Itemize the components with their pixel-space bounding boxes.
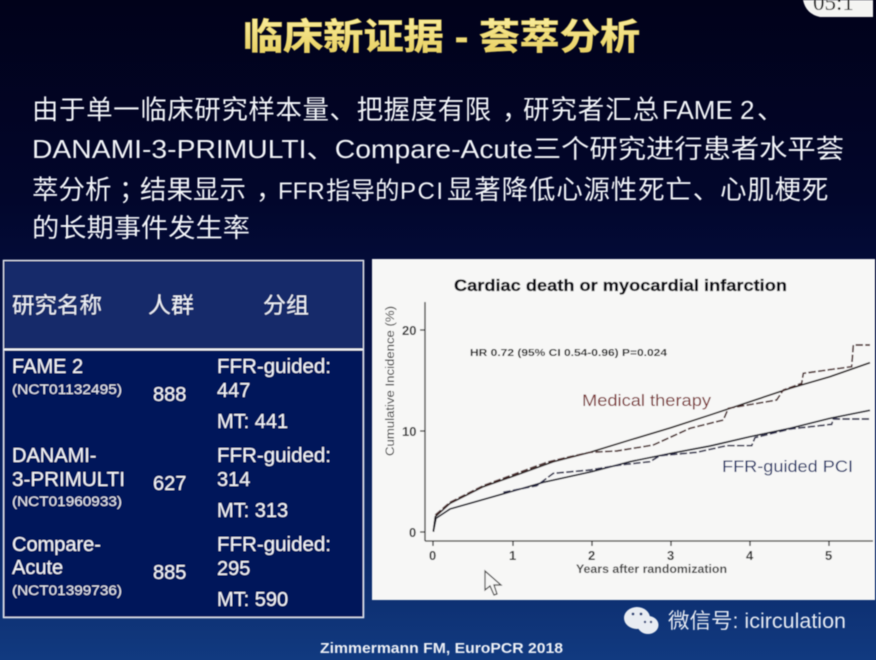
intro text block: 研究者汇总: [523, 95, 660, 125]
x axis: Years after randomization: [576, 564, 727, 576]
label: Medical therapy: Medical therapy: [582, 392, 712, 410]
intro text block: PCI: [400, 178, 445, 205]
intro text block: 显著降低心源性死亡、心肌梗死: [447, 175, 829, 205]
intro text block: 的长期事件发生率: [32, 213, 250, 243]
icon: WeChat logo: [624, 607, 658, 634]
intro text block: ；: [119, 175, 146, 205]
row: FAME 2: (NCT01132495): [12, 382, 122, 397]
row: Compare-Acute: Compare-: [12, 534, 101, 556]
row: DANAMI-3-PRIMULTI: [12, 445, 331, 522]
intro text block: FFR: [278, 178, 325, 205]
curve: FFR-guided PCI: [433, 410, 870, 532]
row: Compare-Acute: MT: 590: [217, 589, 288, 611]
icon: mouse cursor: [485, 571, 501, 595]
intro text block: 指导的: [326, 177, 400, 205]
x axis: 2: [588, 548, 595, 563]
y axis: 10: [402, 424, 416, 439]
row: Compare-Acute: [12, 534, 331, 611]
watermark: WeChat account: [624, 607, 846, 634]
intro text block: ，: [502, 95, 528, 125]
intro text block: FAME 2: [662, 95, 754, 125]
x axis: 4: [746, 548, 754, 563]
citation: Zimmermann FM, EuroPCR 2018: [320, 640, 563, 657]
table header: 分组: [263, 293, 309, 318]
curve: medical therapy: [433, 345, 870, 532]
intro text block: ，: [256, 175, 282, 205]
intro text block: 、: [757, 95, 784, 125]
panel: study table: [4, 260, 364, 618]
row: Compare-Acute: FFR-guided:: [217, 534, 331, 556]
title: 临床新证据 - 荟萃分析: [243, 16, 640, 57]
y axis: 0: [409, 525, 416, 540]
row: FAME 2: MT: 441: [217, 411, 288, 433]
row: DANAMI-3-PRIMULTI: 3-PRIMULTI: [12, 469, 125, 491]
chart title: Cardiac death or myocardial infarction: [454, 277, 787, 295]
intro text block: [32, 95, 844, 243]
intro text block: DANAMI-3-PRIMULTI、Compare-Acute三个研究进行患者水平荟: [32, 134, 844, 164]
row: FAME 2: FFR-guided:: [217, 356, 331, 378]
panel: line chart: [372, 259, 875, 600]
intro text block: 由于单一临床研究样本量、把握度有限: [32, 95, 492, 125]
intro text block: 萃分析: [32, 175, 112, 205]
row: FAME 2: FAME 2: [12, 356, 83, 378]
table header: [4, 261, 363, 350]
row: DANAMI-3-PRIMULTI: 314: [217, 469, 250, 491]
row: DANAMI-3-PRIMULTI: FFR-guided:: [217, 445, 331, 467]
x axis: 1: [509, 548, 516, 563]
y axis: Cumulative Incidence (%): [385, 306, 397, 456]
x axis: 3: [667, 548, 674, 563]
hazard ratio annotation: HR 0.72 (95% CI 0.54-0.96) P=0.024: [470, 347, 667, 359]
row: FAME 2: 888: [153, 384, 186, 406]
table header: 研究名称: [12, 293, 102, 318]
row: Compare-Acute: (NCT01399736): [12, 583, 122, 598]
watermark: WeChat account: 微信号: icirculation: [668, 610, 846, 633]
timestamp badge: [803, 0, 873, 17]
row: DANAMI-3-PRIMULTI: 627: [153, 473, 186, 495]
label: FFR-guided PCI: FFR-guided PCI: [722, 458, 853, 476]
row: DANAMI-3-PRIMULTI: DANAMI-: [12, 445, 96, 467]
row: Compare-Acute: 295: [217, 558, 250, 580]
row: DANAMI-3-PRIMULTI: MT: 313: [217, 500, 288, 522]
row: Compare-Acute: Acute: [12, 557, 63, 579]
y axis: 20: [402, 323, 416, 338]
row: DANAMI-3-PRIMULTI: (NCT01960933): [12, 494, 122, 509]
table header: 人群: [148, 293, 194, 318]
x axis: [425, 541, 873, 576]
row: FAME 2: 447: [217, 380, 250, 402]
intro text block: 结果显示: [140, 175, 246, 205]
row: FAME 2: [12, 356, 331, 433]
x axis: 0: [429, 548, 436, 563]
row: Compare-Acute: 885: [153, 562, 186, 584]
y axis: [385, 302, 425, 541]
x axis: 5: [825, 548, 832, 563]
